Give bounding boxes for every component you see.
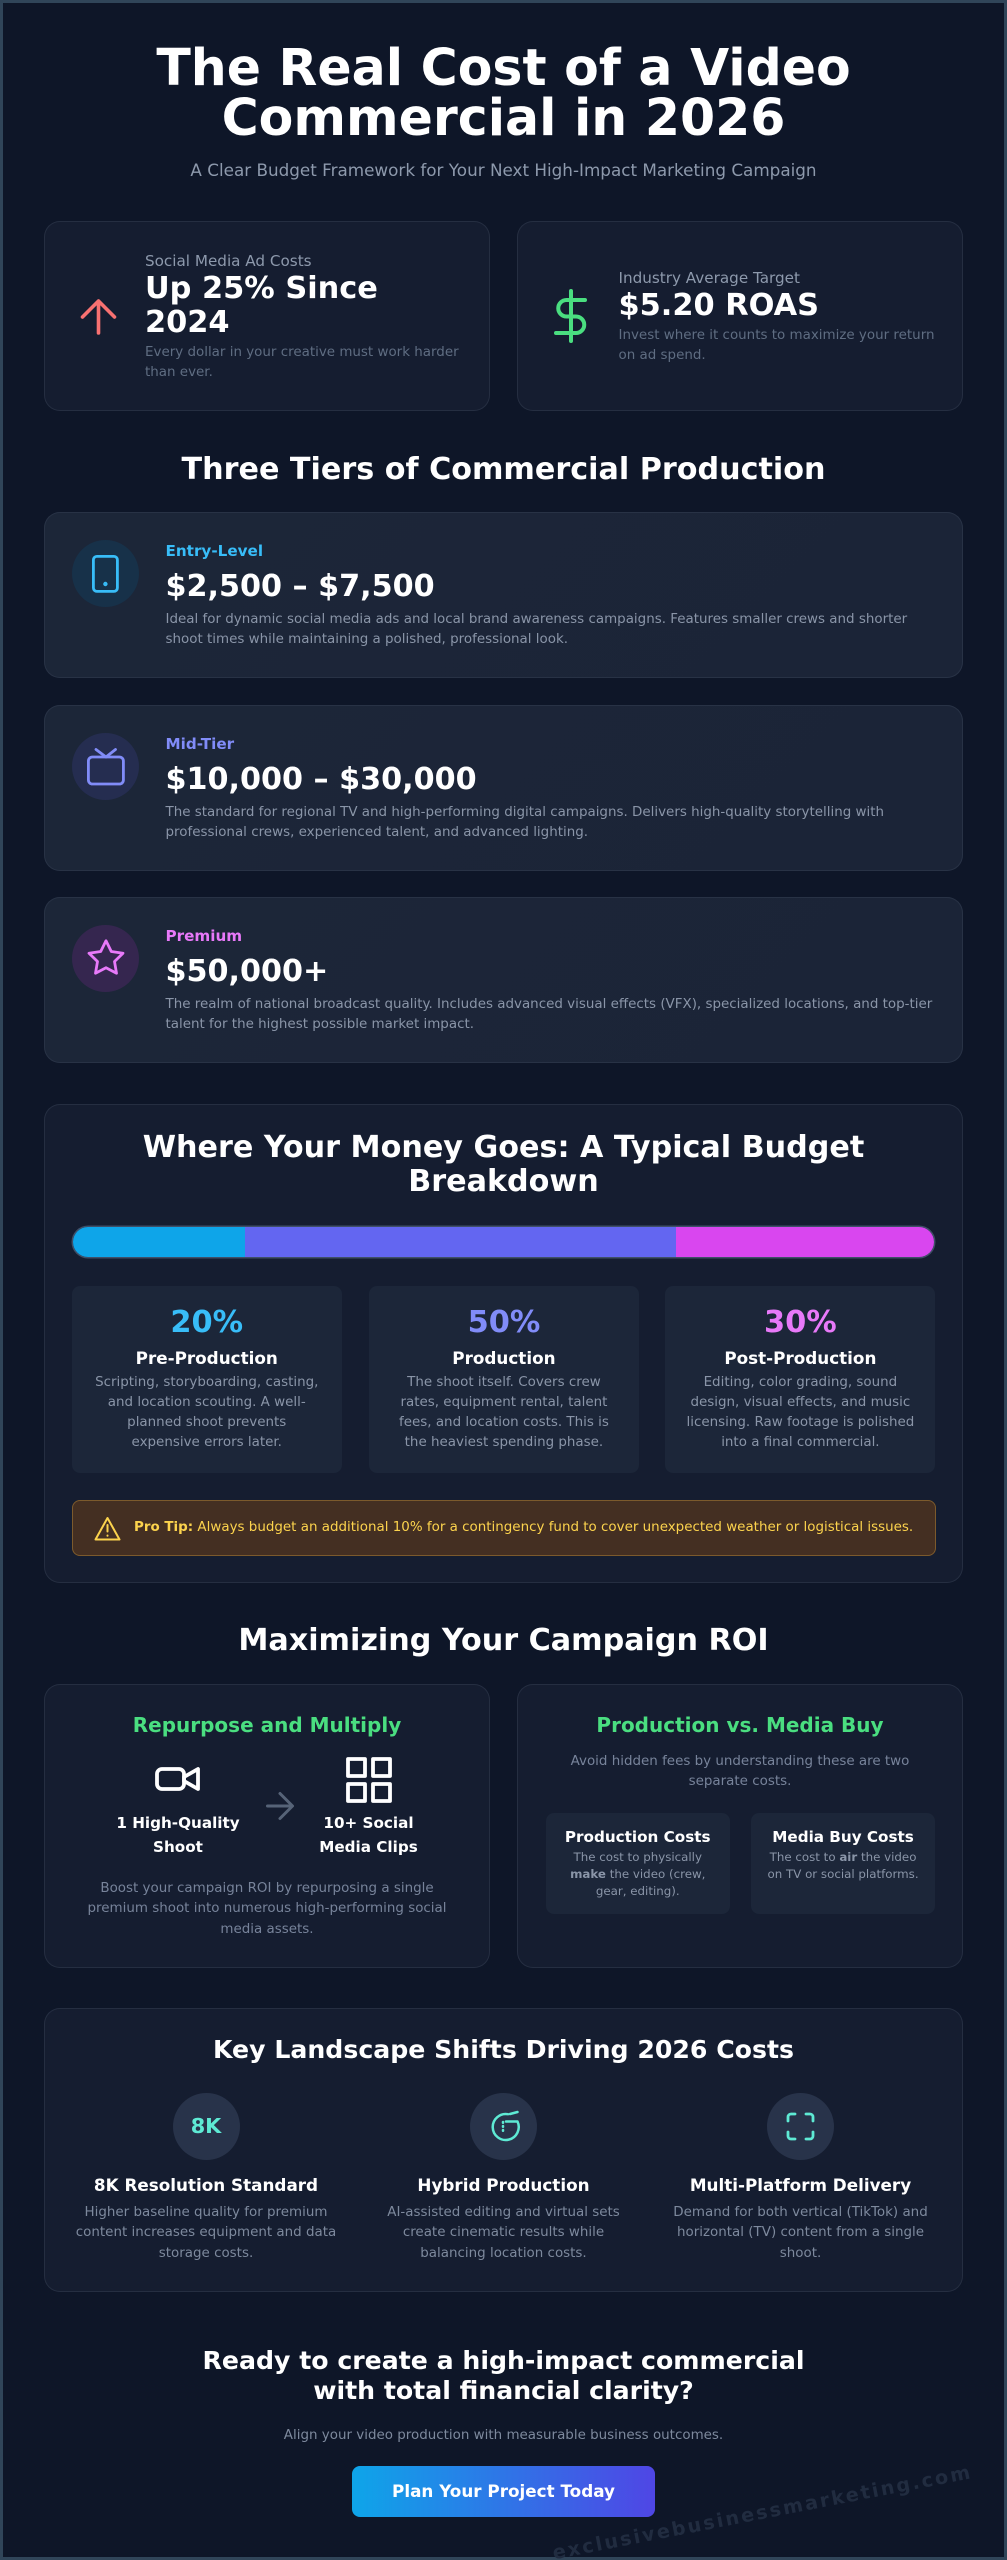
stat note: than ever. bbox=[145, 365, 213, 380]
icon: 8K badge bbox=[172, 2093, 240, 2160]
heading: budget breakdown: Breakdown bbox=[408, 1164, 599, 1199]
panel heading: Production vs. Media Buy bbox=[596, 1713, 884, 1737]
panel: entry-level tier bbox=[44, 512, 963, 678]
panel: social media ad costs bbox=[44, 221, 490, 411]
tier label: Entry-Level bbox=[166, 542, 263, 560]
panel: production vs media buy bbox=[517, 1684, 963, 1968]
phase description: planned shoot prevents bbox=[127, 1415, 286, 1430]
icon: four-square grid bbox=[346, 1757, 392, 1803]
card: production costs bbox=[546, 1813, 730, 1914]
card: post-production bbox=[665, 1286, 935, 1473]
shift: multi-platform delivery bbox=[673, 2093, 928, 2261]
output label: Media Clips bbox=[319, 1838, 418, 1856]
tier description bbox=[165, 997, 932, 1032]
subtitle: A Clear Budget Framework for Your Next High-Impact Marketing Campaign bbox=[190, 160, 817, 180]
panel: premium tier bbox=[44, 897, 963, 1063]
stat value: 2024 bbox=[145, 305, 230, 340]
phase description: design, visual effects, and music bbox=[690, 1395, 910, 1410]
tier price: $50,000+ bbox=[166, 954, 328, 988]
source label bbox=[116, 1814, 240, 1856]
shift description bbox=[387, 2205, 620, 2261]
heading: budget breakdown bbox=[143, 1130, 864, 1199]
stat note bbox=[145, 345, 459, 380]
card title: Media Buy Costs bbox=[772, 1828, 914, 1846]
phase name: Post-Production bbox=[724, 1348, 876, 1368]
call to action subtext: Align your video production with measurable business outcomes. bbox=[284, 2428, 723, 2443]
call to action heading: with total financial clarity? bbox=[313, 2376, 694, 2405]
panel description: premium shoot into numerous high-performing social bbox=[87, 1901, 447, 1916]
icon: warning triangle bbox=[94, 1517, 120, 1540]
stacked budget bar bbox=[73, 1227, 934, 1257]
tier description bbox=[166, 612, 908, 647]
output label: 10+ Social bbox=[323, 1814, 414, 1832]
source label: Shoot bbox=[153, 1838, 203, 1856]
panel description bbox=[87, 1881, 447, 1937]
percentage: 30% bbox=[764, 1304, 837, 1340]
card text: The cost to air the video bbox=[770, 1850, 916, 1864]
panel: industry average target bbox=[517, 221, 963, 411]
tier description: talent for the highest possible market impact. bbox=[166, 1017, 474, 1032]
card text bbox=[570, 1850, 705, 1898]
shift title: Multi-Platform Delivery bbox=[690, 2175, 911, 2195]
call to action heading: Ready to create a high-impact commercial bbox=[203, 2346, 804, 2375]
icon: frame corners bbox=[767, 2093, 834, 2160]
output label bbox=[319, 1814, 418, 1856]
phase description bbox=[95, 1374, 318, 1450]
icon: hybrid dial bbox=[470, 2093, 537, 2160]
tier description: Ideal for dynamic social media ads and local brand awareness campaigns. Features smaller crews and shorter bbox=[166, 612, 907, 627]
panel description: separate costs. bbox=[689, 1774, 791, 1789]
panel: budget breakdown bbox=[44, 1104, 963, 1583]
title: The Real Cost of a Video bbox=[156, 38, 851, 97]
tier label: Mid-Tier bbox=[166, 735, 234, 753]
icon: tv bbox=[72, 732, 139, 800]
card text: gear, editing). bbox=[596, 1884, 680, 1898]
icon: video camera bbox=[155, 1767, 200, 1791]
panel heading: Repurpose and Multiply bbox=[133, 1713, 401, 1737]
shift title: 8K Resolution Standard bbox=[94, 2175, 318, 2195]
shift title: Hybrid Production bbox=[417, 2175, 590, 2195]
tier description: shoot times while maintaining a polished, professional look. bbox=[166, 632, 568, 647]
source label: 1 High-Quality bbox=[116, 1814, 240, 1832]
panel description: media assets. bbox=[220, 1922, 314, 1937]
shift description: AI-assisted editing and virtual sets bbox=[387, 2205, 620, 2220]
stat label: Industry Average Target bbox=[618, 269, 800, 287]
card: media buy costs bbox=[751, 1813, 935, 1914]
tier price: $10,000 – $30,000 bbox=[166, 762, 477, 796]
tier description: The standard for regional TV and high-performing digital campaigns. Delivers high-quality storytelling with bbox=[166, 805, 884, 820]
phase description: the heaviest spending phase. bbox=[405, 1435, 603, 1450]
icon: arrow bbox=[266, 1792, 294, 1820]
card text: The cost to physically bbox=[574, 1850, 702, 1864]
tier description: professional crews, experienced talent, and advanced lighting. bbox=[166, 825, 588, 840]
percentage: 50% bbox=[468, 1304, 540, 1340]
button: plan your project today: Plan Your Project Today bbox=[392, 2481, 615, 2501]
tier label: Premium bbox=[166, 927, 242, 945]
stat note: Every dollar in your creative must work harder bbox=[145, 345, 459, 360]
stat note bbox=[618, 328, 934, 363]
panel: repurpose and multiply bbox=[44, 1684, 490, 1968]
card: production bbox=[369, 1286, 639, 1473]
card text: make the video (crew, bbox=[570, 1867, 705, 1881]
stat label: Social Media Ad Costs bbox=[145, 252, 312, 270]
button: plan your project today bbox=[352, 2466, 655, 2516]
phase description bbox=[686, 1374, 914, 1450]
shift description: Demand for both vertical (TikTok) and bbox=[673, 2205, 928, 2220]
panel: mid-tier bbox=[44, 705, 963, 871]
card text: on TV or social platforms. bbox=[768, 1867, 919, 1881]
phase description: Editing, color grading, sound bbox=[704, 1374, 897, 1390]
tier description: The realm of national broadcast quality. Includes advanced visual effects (VFX), specialized locations, and top-tier bbox=[166, 997, 932, 1012]
shift description: balancing location costs. bbox=[420, 2246, 587, 2261]
tier description bbox=[165, 805, 884, 840]
shift description: horizontal (TV) content from a single bbox=[677, 2225, 924, 2240]
stat value bbox=[145, 271, 378, 340]
panel heading: Key Landscape Shifts Driving 2026 Costs bbox=[213, 2035, 794, 2064]
shift description bbox=[673, 2205, 928, 2261]
phase description: and location scouting. A well- bbox=[108, 1395, 306, 1410]
icon: star bbox=[72, 925, 139, 992]
icon: red up arrow bbox=[80, 299, 116, 335]
icon: phone bbox=[72, 540, 139, 607]
title bbox=[156, 38, 851, 147]
phase description: expensive errors later. bbox=[132, 1435, 282, 1450]
shift description bbox=[76, 2205, 336, 2261]
shift description: create cinematic results while bbox=[403, 2225, 604, 2240]
panel description: Avoid hidden fees by understanding these are two bbox=[571, 1754, 909, 1769]
phase name: Pre-Production bbox=[136, 1348, 278, 1368]
phase description: Scripting, storyboarding, casting, bbox=[95, 1374, 318, 1390]
shift description: shoot. bbox=[780, 2246, 821, 2261]
phase description: into a final commercial. bbox=[721, 1435, 880, 1450]
icon: 8K badge: 8K bbox=[191, 2114, 221, 2138]
stat note: Invest where it counts to maximize your return bbox=[618, 328, 934, 343]
panel: key landscape shifts bbox=[44, 2008, 963, 2292]
title: Commercial in 2026 bbox=[222, 88, 785, 147]
phase description: The shoot itself. Covers crew bbox=[407, 1374, 601, 1390]
percentage: 20% bbox=[170, 1304, 243, 1340]
panel description bbox=[570, 1754, 909, 1789]
heading: maximizing ROI: Maximizing Your Campaign ROI bbox=[238, 1623, 769, 1658]
tier price: $2,500 – $7,500 bbox=[166, 568, 435, 604]
callout: pro tip bbox=[72, 1500, 936, 1556]
card: pre-production bbox=[72, 1286, 342, 1473]
phase description: rates, equipment rental, talent bbox=[400, 1395, 607, 1410]
shift: hybrid production bbox=[387, 2093, 620, 2261]
panel description: Boost your campaign ROI by repurposing a single bbox=[100, 1881, 434, 1896]
call to action heading bbox=[203, 2346, 804, 2405]
shift description: Higher baseline quality for premium bbox=[85, 2205, 327, 2220]
phase description: fees, and location costs. This is bbox=[399, 1415, 609, 1430]
icon: green dollar sign bbox=[554, 289, 587, 343]
phase description bbox=[399, 1374, 609, 1450]
stat value: Up 25% Since bbox=[145, 271, 378, 306]
phase name: Production bbox=[452, 1348, 556, 1368]
card text bbox=[768, 1850, 919, 1881]
heading: three tiers: Three Tiers of Commercial Production bbox=[182, 452, 825, 486]
heading: budget breakdown: Where Your Money Goes: A Typical Budget bbox=[143, 1130, 864, 1165]
stat value: $5.20 ROAS bbox=[618, 288, 819, 323]
card title: Production Costs bbox=[565, 1828, 711, 1846]
phase description: licensing. Raw footage is polished bbox=[686, 1415, 914, 1430]
shift description: storage costs. bbox=[159, 2246, 253, 2261]
tip text: Pro Tip: Always budget an additional 10% for a contingency fund to cover unexpected weather or logistical issues. bbox=[134, 1520, 913, 1535]
shift description: content increases equipment and data bbox=[76, 2225, 336, 2240]
stat note: on ad spend. bbox=[618, 348, 706, 363]
shift: 8K resolution bbox=[76, 2093, 336, 2261]
